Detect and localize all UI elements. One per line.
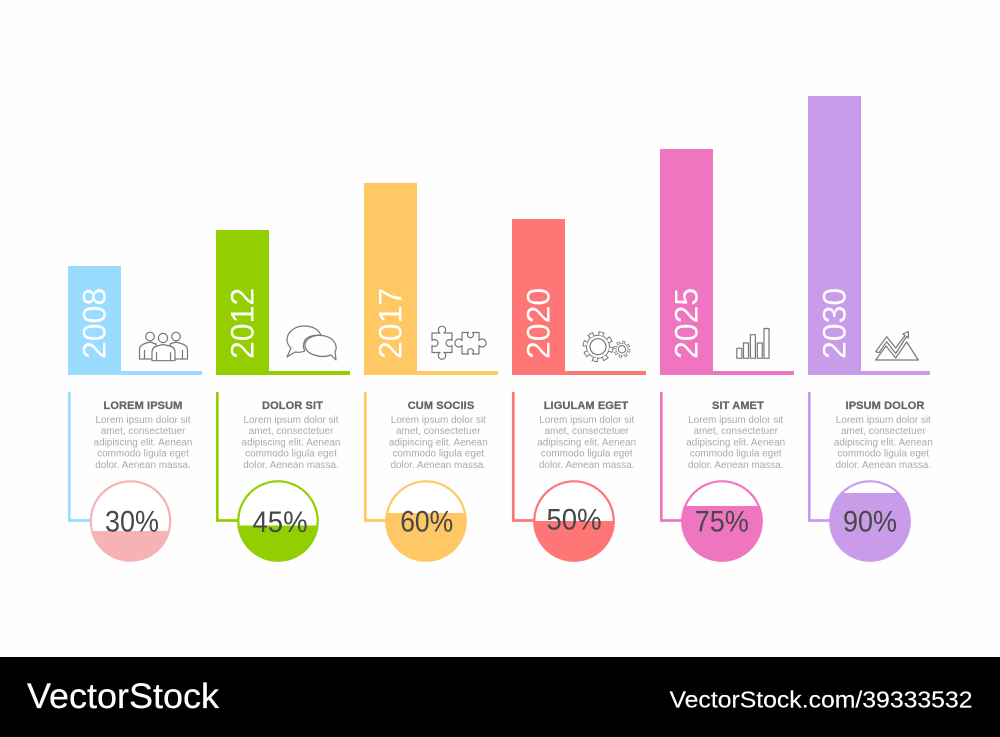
heading: CUM SOCIIS	[408, 400, 474, 412]
description: dolor. Aenean massa.	[539, 460, 634, 471]
column 2030	[808, 96, 933, 562]
connector 2012	[217, 392, 239, 520]
bar 2017	[364, 183, 498, 375]
gauge 60%	[385, 480, 467, 562]
year 2025: 2025	[668, 288, 704, 359]
connector 2030	[809, 392, 831, 520]
gauge 50%: 50%	[546, 504, 602, 537]
bar 2012	[216, 230, 350, 375]
description: adipiscing elit. Aenean	[537, 437, 636, 448]
icon: gears	[585, 334, 629, 360]
description: amet, consectetuer	[249, 426, 334, 437]
description: amet, consectetuer	[693, 426, 779, 437]
icon: puzzle pieces	[432, 326, 486, 359]
gauge 45%	[237, 480, 319, 562]
gauge 60%: 60%	[400, 506, 453, 538]
year 2008: 2008	[76, 288, 112, 359]
gauge 30%	[90, 480, 171, 562]
description: Lorem ipsum dolor sit	[96, 415, 191, 426]
year 2020: 2020	[520, 288, 556, 359]
description: adipiscing elit. Aenean	[686, 437, 785, 448]
description: Lorem ipsum dolor sit	[391, 415, 486, 426]
column 2017	[364, 183, 498, 562]
description: amet, consectetuer	[101, 426, 186, 437]
bar 2008	[68, 266, 202, 375]
description: dolor. Aenean massa.	[688, 460, 783, 471]
year 2030: 2030	[816, 288, 852, 359]
description: commodo ligula eget	[392, 449, 484, 460]
description: commodo ligula eget	[837, 449, 929, 460]
heading: LOREM IPSUM	[104, 400, 182, 412]
description: dolor. Aenean massa.	[243, 460, 339, 471]
description: amet, consectetuer	[544, 426, 630, 437]
connector 2017	[365, 392, 387, 520]
description: commodo ligula eget	[97, 449, 189, 460]
description: dolor. Aenean massa.	[95, 460, 191, 471]
icon: speech bubbles	[287, 326, 336, 360]
description: adipiscing elit. Aenean	[834, 437, 933, 448]
footer url: VectorStock.com/39333532	[670, 687, 972, 713]
description: amet, consectetuer	[841, 426, 926, 437]
gauge 90%: 90%	[843, 506, 897, 538]
heading: DOLOR SIT	[262, 400, 323, 412]
heading: IPSUM DOLOR	[846, 400, 924, 412]
footer logo: VectorStock	[27, 676, 219, 716]
description: adipiscing elit. Aenean	[242, 437, 340, 448]
gauge 30%: 30%	[105, 506, 159, 538]
description: dolor. Aenean massa.	[391, 460, 486, 471]
connector 2008	[69, 392, 91, 520]
gauge 90%	[829, 480, 911, 562]
column 2008	[68, 266, 202, 562]
year 2012: 2012	[224, 288, 260, 359]
column 2012	[216, 230, 350, 562]
description: commodo ligula eget	[541, 449, 633, 460]
connector 2020	[513, 392, 535, 520]
bar 2020	[512, 219, 646, 375]
bar 2025	[660, 149, 794, 375]
description: Lorem ipsum dolor sit	[244, 415, 339, 426]
gauge 75%	[681, 480, 763, 562]
icon: people	[140, 332, 188, 361]
bar 2030	[808, 96, 930, 375]
gauge 75%: 75%	[695, 506, 749, 538]
description: Lorem ipsum dolor sit	[539, 415, 634, 426]
icon: mountains with arrow	[876, 332, 918, 360]
footer band	[0, 657, 1000, 737]
description: adipiscing elit. Aenean	[94, 437, 192, 448]
column 2025	[660, 149, 794, 562]
description: commodo ligula eget	[245, 449, 337, 460]
column 2020	[512, 219, 646, 562]
description: Lorem ipsum dolor sit	[836, 415, 931, 426]
description: commodo ligula eget	[690, 449, 782, 460]
description: Lorem ipsum dolor sit	[688, 415, 783, 426]
heading: SIT AMET	[712, 400, 764, 412]
connector 2025	[661, 392, 683, 520]
gauge 50%	[533, 480, 615, 562]
description: adipiscing elit. Aenean	[389, 437, 488, 448]
year 2017: 2017	[372, 288, 408, 359]
gauge 45%: 45%	[252, 506, 308, 539]
description: dolor. Aenean massa.	[836, 460, 931, 471]
heading: LIGULAM EGET	[544, 400, 628, 412]
description: amet, consectetuer	[396, 426, 481, 437]
icon: bar chart	[737, 328, 769, 358]
